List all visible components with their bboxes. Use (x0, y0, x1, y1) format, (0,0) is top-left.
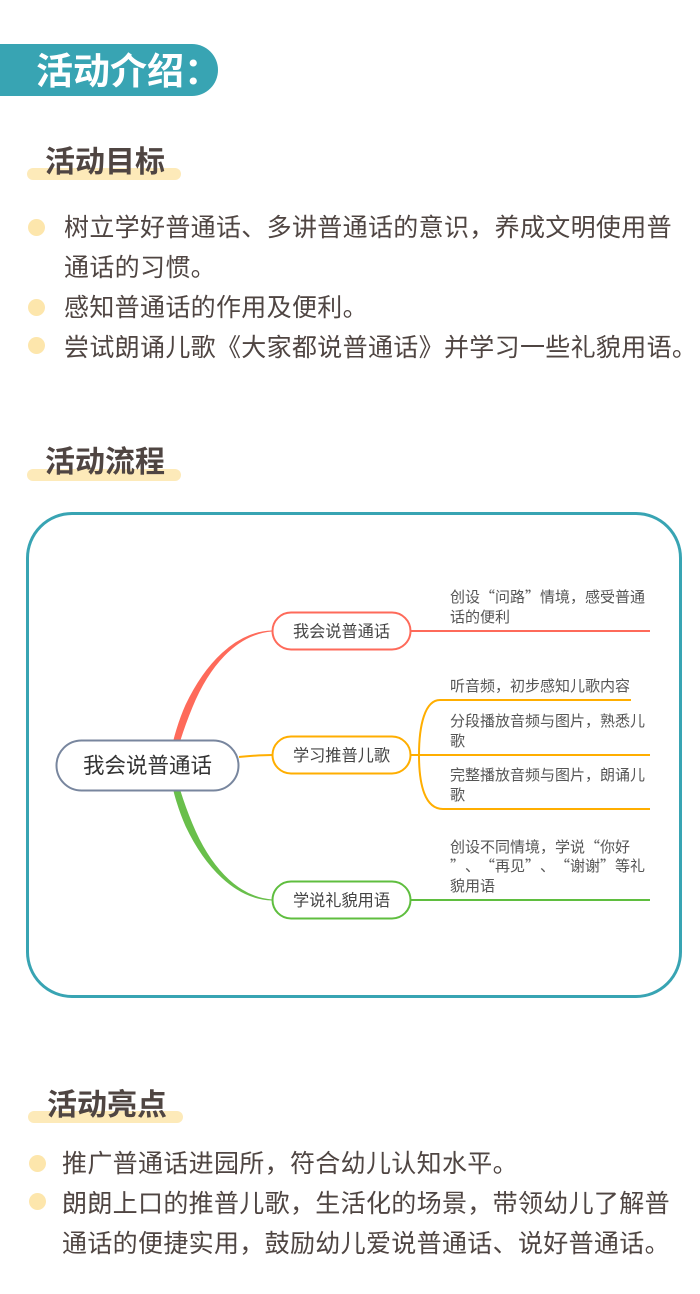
branch: red connector (174, 631, 272, 740)
branch: orange connector (239, 755, 272, 757)
node: 学习推普儿歌: 学习推普儿歌 (293, 742, 390, 766)
node: 学习推普儿歌: 分段播放音频与图片，熟悉儿 (450, 710, 645, 731)
node: 我会说普通话 (272, 586, 650, 650)
goals list (28, 208, 697, 364)
node: 学习推普儿歌: 听音频，初步感知儿歌内容 (450, 675, 630, 696)
node: 学习推普儿歌: 歌 (450, 784, 465, 805)
goals list: 感知普通话的作用及便利。 (64, 288, 368, 324)
highlights list: 推广普通话进园所，符合幼儿认知水平。 (62, 1144, 518, 1180)
root node: 我会说普通话 (83, 749, 212, 780)
node: 学说礼貌用语: 貌用语 (450, 875, 495, 896)
node: 学习推普儿歌 (272, 675, 650, 809)
node: 我会说普通话: 话的便利 (450, 606, 510, 627)
goals list: 尝试朗诵儿歌《大家都说普通话》并学习一些礼貌用语。 (64, 328, 697, 364)
root node (56, 740, 238, 790)
highlights list (29, 1144, 670, 1260)
section heading: process: 活动流程 (45, 437, 165, 481)
node: 学习推普儿歌: 歌 (450, 730, 465, 751)
section heading: highlights: 活动亮点 (47, 1080, 167, 1124)
branch: green connector (174, 791, 272, 900)
highlights list: 通话的便捷实用，鼓励幼儿爱说普通话、说好普通话。 (62, 1224, 670, 1260)
node: 学说礼貌用语: 学说礼貌用语 (293, 887, 390, 911)
title banner (0, 44, 218, 96)
node: 学说礼貌用语: ”、“再见”、“谢谢”等礼 (450, 855, 645, 876)
node: 我会说普通话: 我会说普通话 (293, 618, 390, 642)
node: 学习推普儿歌: 完整播放音频与图片，朗诵儿 (450, 764, 645, 785)
node: 学说礼貌用语: 创设不同情境，学说“你好 (450, 836, 630, 857)
section heading: goals: 活动目标 (45, 137, 165, 181)
title text: 活动介绍： (36, 41, 221, 95)
highlights list: 朗朗上口的推普儿歌，生活化的场景，带领幼儿了解普 (62, 1184, 670, 1220)
node: 我会说普通话: 创设“问路”情境，感受普通 (450, 586, 645, 607)
panel: mind map (26, 512, 682, 998)
node: 学说礼貌用语 (272, 836, 650, 918)
goals list: 树立学好普通话、多讲普通话的意识，养成文明使用普 (64, 208, 672, 244)
goals list: 通话的习惯。 (64, 248, 216, 284)
